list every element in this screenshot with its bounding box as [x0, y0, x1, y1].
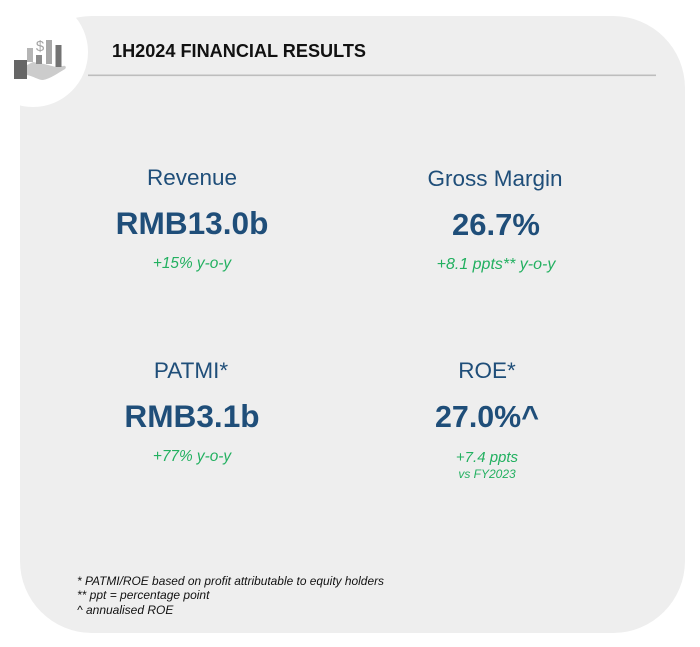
- metric: ROE: vs FY2023: [458, 467, 516, 481]
- footnotes: ^ annualised ROE: [77, 603, 174, 617]
- metric: PATMI: [124, 358, 260, 465]
- metric: revenue: Revenue: [147, 165, 237, 190]
- metric: revenue: +15% y-o-y: [153, 255, 232, 272]
- footnotes: [77, 574, 384, 617]
- metric: ROE: +7.4 ppts: [456, 449, 519, 466]
- header rule: [88, 74, 656, 76]
- title: 1H2024 FINANCIAL RESULTS: [112, 41, 366, 61]
- metric: gross margin: 26.7%: [452, 207, 540, 242]
- metric: ROE: ROE*: [458, 358, 516, 383]
- metric: ROE: [435, 358, 539, 481]
- metric: revenue: [116, 165, 268, 272]
- footnotes: ** ppt = percentage point: [77, 588, 210, 602]
- icon: hand holding bar chart: [0, 0, 88, 107]
- metric: PATMI: PATMI*: [154, 358, 228, 383]
- icon: hand holding bar chart: $: [36, 38, 45, 55]
- metric: gross margin: [427, 166, 563, 273]
- metric: ROE: 27.0%^: [435, 400, 539, 434]
- metric: PATMI: +77% y-o-y: [153, 448, 232, 465]
- metric: gross margin: +8.1 ppts** y-o-y: [437, 256, 556, 273]
- footnotes: * PATMI/ROE based on profit attributable to equity holders: [77, 574, 384, 588]
- metric: gross margin: Gross Margin: [427, 166, 563, 191]
- metric: revenue: RMB13.0b: [116, 205, 268, 241]
- metric: PATMI: RMB3.1b: [124, 398, 260, 434]
